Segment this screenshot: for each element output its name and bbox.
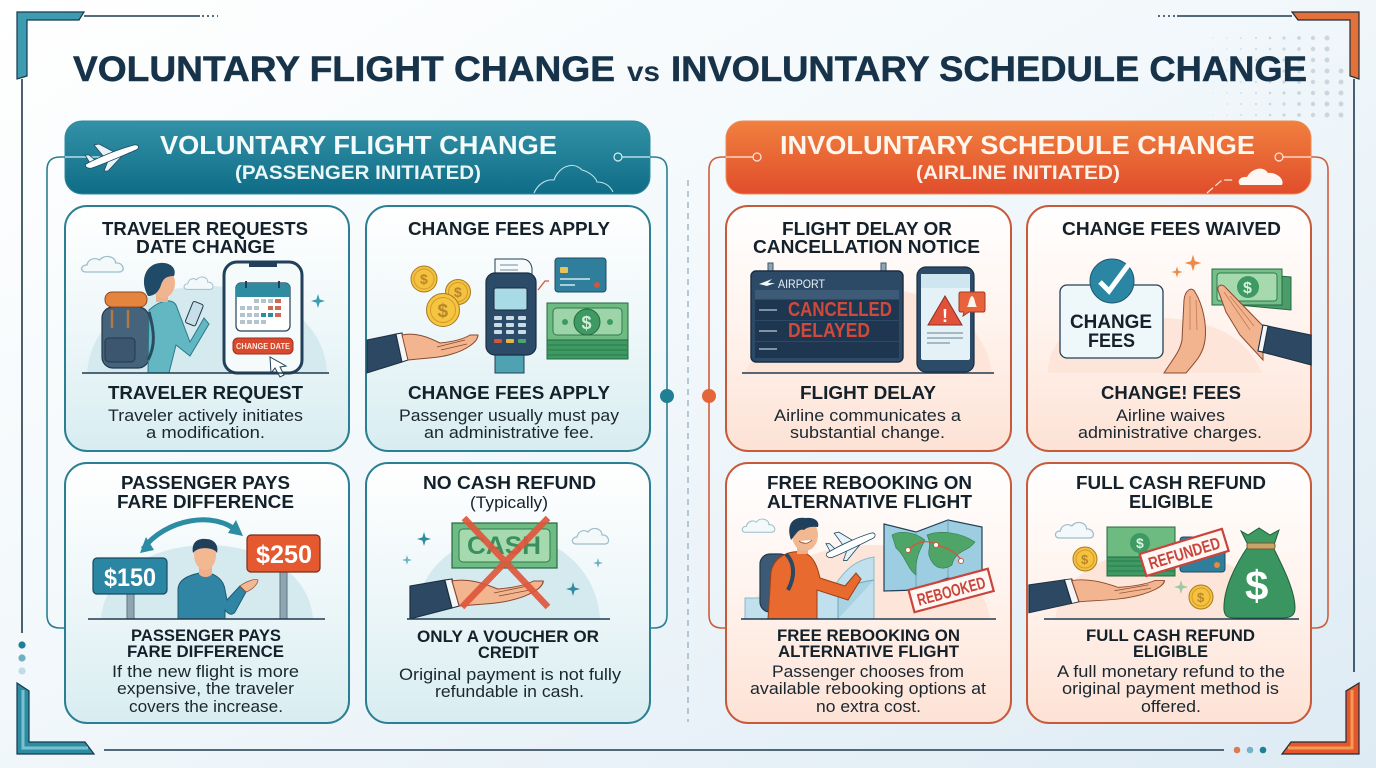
card: no cash refund [366, 463, 650, 723]
label and description: Traveler actively initiates [108, 406, 303, 425]
card: flight delay or cancellation notice [726, 206, 1011, 451]
illustration: change fees blocked by hand: FEES [1088, 331, 1135, 352]
heading: PASSENGER PAYS [121, 472, 290, 493]
illustration: coins, card terminal and cash: $ [454, 284, 462, 300]
illustration: change fees blocked by hand: CHANGE [1070, 312, 1152, 333]
connector bracket: involuntary panel [709, 157, 1328, 628]
illustration: coins, card terminal and cash: $ [420, 271, 428, 287]
label and description: TRAVELER REQUEST [108, 382, 304, 403]
label and description: FREE REBOOKING ON [777, 627, 960, 645]
heading: CANCELLATION NOTICE [753, 236, 980, 257]
card: change fees waived [1027, 206, 1311, 451]
illustration: crossed out cash over hand: CASH [467, 532, 541, 560]
heading [117, 472, 294, 512]
label and description: Original payment is not fully [399, 665, 622, 684]
illustration: airport board and phone alert: AIRPORT [778, 277, 826, 291]
heading: CHANGE FEES WAIVED [1062, 218, 1281, 239]
heading: ALTERNATIVE FLIGHT [767, 491, 973, 512]
label and description [750, 627, 986, 716]
center divider [687, 180, 689, 722]
label and description: If the new flight is more [112, 662, 299, 681]
illustration: airport board and phone alert [742, 263, 994, 373]
label and description: available rebooking options at [750, 679, 986, 698]
heading: CHANGE FEES APPLY [408, 218, 611, 239]
corner frame: top left [17, 12, 218, 79]
illustration: price signs and passenger: $250 [256, 541, 312, 569]
label and description: offered. [1141, 697, 1201, 716]
panel header: voluntary [65, 121, 650, 194]
heading [767, 472, 973, 512]
illustration: coins, card terminal and cash: $ [582, 313, 592, 333]
label and description: CHANGE FEES APPLY [408, 382, 611, 403]
label and description: administrative charges. [1078, 423, 1262, 442]
illustration: refunded cash and money bag: REFUNDED [1146, 534, 1223, 573]
label and description: no extra cost. [816, 697, 921, 716]
illustration: change fees blocked by hand [1048, 255, 1311, 373]
corner frame: top right [1158, 12, 1359, 79]
heading: FREE REBOOKING ON [767, 472, 972, 493]
label and description: ELIGIBLE [1133, 643, 1208, 661]
illustration: refunded cash and money bag [1029, 522, 1299, 619]
label and description: FLIGHT DELAY [800, 382, 937, 403]
label and description [399, 628, 622, 701]
illustration: traveler with phone calendar [82, 256, 329, 377]
label and description: substantial change. [790, 423, 945, 442]
connector bracket: voluntary panel [47, 157, 667, 628]
heading: (Typically) [470, 493, 548, 512]
label and description [399, 382, 620, 442]
label and description: FARE DIFFERENCE [127, 643, 284, 661]
title: vs [627, 56, 660, 87]
label and description: CHANGE! FEES [1101, 382, 1241, 403]
heading: DATE CHANGE [136, 236, 275, 257]
label and description: original payment method is [1062, 679, 1279, 698]
heading: FARE DIFFERENCE [117, 491, 294, 512]
title: VOLUNTARY FLIGHT CHANGE [73, 50, 615, 89]
label and description: ONLY A VOUCHER OR [417, 628, 599, 646]
illustration: airport board and phone alert: CANCELLED [788, 299, 892, 321]
label and description: Airline communicates a [774, 406, 962, 425]
title [73, 50, 1307, 89]
heading: TRAVELER REQUESTS [102, 218, 308, 239]
decorative dot pattern top right [1213, 38, 1341, 116]
connector node teal [660, 389, 674, 403]
label and description: refundable in cash. [435, 682, 584, 701]
heading: FLIGHT DELAY OR [782, 218, 952, 239]
heading [753, 218, 980, 257]
illustration: refunded cash and money bag: $ [1081, 552, 1089, 567]
illustration: traveler with phone calendar: CHANGE DATE [236, 341, 290, 351]
label and description: CREDIT [478, 644, 539, 662]
heading [102, 218, 308, 257]
card: traveler requests date change [65, 206, 349, 451]
corner frame: bottom left [17, 683, 94, 754]
illustration: crossed out cash over hand [402, 518, 610, 619]
corner frame: bottom right [1282, 683, 1359, 754]
label and description [1057, 627, 1285, 716]
heading: NO CASH REFUND [423, 472, 596, 493]
illustration: traveler, map and rebooked stamp [741, 518, 996, 619]
heading: ELIGIBLE [1129, 491, 1213, 512]
label and description: A full monetary refund to the [1057, 662, 1285, 681]
connector node orange [702, 389, 716, 403]
illustration: airport board and phone alert: ! [942, 306, 948, 326]
label and description [1078, 382, 1262, 442]
card: full cash refund eligible [1027, 463, 1311, 723]
label and description: expensive, the traveler [117, 679, 294, 698]
card: free rebooking on alternative flight [726, 463, 1011, 723]
illustration: refunded cash and money bag: $ [1136, 535, 1144, 551]
heading: FULL CASH REFUND [1076, 472, 1266, 493]
illustration: airport board and phone alert: DELAYED [788, 320, 870, 342]
panel header: voluntary: (PASSENGER INITIATED) [235, 163, 481, 184]
card: passenger pays fare difference [65, 463, 349, 723]
illustration: refunded cash and money bag: $ [1245, 562, 1268, 609]
heading [423, 472, 596, 512]
panel header: involuntary: INVOLUNTARY SCHEDULE CHANGE [780, 130, 1255, 160]
label and description: an administrative fee. [424, 423, 594, 442]
panel header: involuntary: (AIRLINE INITIATED) [916, 163, 1120, 184]
title: INVOLUNTARY SCHEDULE CHANGE [671, 50, 1307, 89]
label and description: Passenger usually must pay [399, 406, 620, 425]
label and description [112, 627, 299, 716]
label and description: ALTERNATIVE FLIGHT [778, 643, 959, 661]
illustration: price signs and passenger [88, 520, 325, 619]
frame dots [18, 641, 1266, 753]
label and description: a modification. [146, 423, 265, 442]
label and description: covers the increase. [129, 697, 283, 716]
label and description: Passenger chooses from [772, 662, 964, 681]
panel header: voluntary: VOLUNTARY FLIGHT CHANGE [160, 130, 557, 160]
illustration: change fees blocked by hand: $ [1243, 280, 1252, 297]
illustration: refunded cash and money bag: $ [1197, 590, 1205, 605]
label and description: PASSENGER PAYS [131, 627, 281, 645]
label and description: FULL CASH REFUND [1086, 627, 1255, 645]
card: change fees apply [366, 206, 650, 451]
panel header: involuntary [726, 121, 1311, 194]
illustration: price signs and passenger: $150 [104, 564, 156, 592]
label and description: Airline waives [1116, 406, 1225, 425]
label and description [108, 382, 304, 442]
illustration: traveler, map and rebooked stamp: REBOOKED [915, 573, 988, 610]
heading [1076, 472, 1266, 512]
illustration: coins, card terminal and cash [367, 258, 628, 373]
illustration: coins, card terminal and cash: $ [438, 301, 448, 322]
label and description [774, 382, 962, 442]
